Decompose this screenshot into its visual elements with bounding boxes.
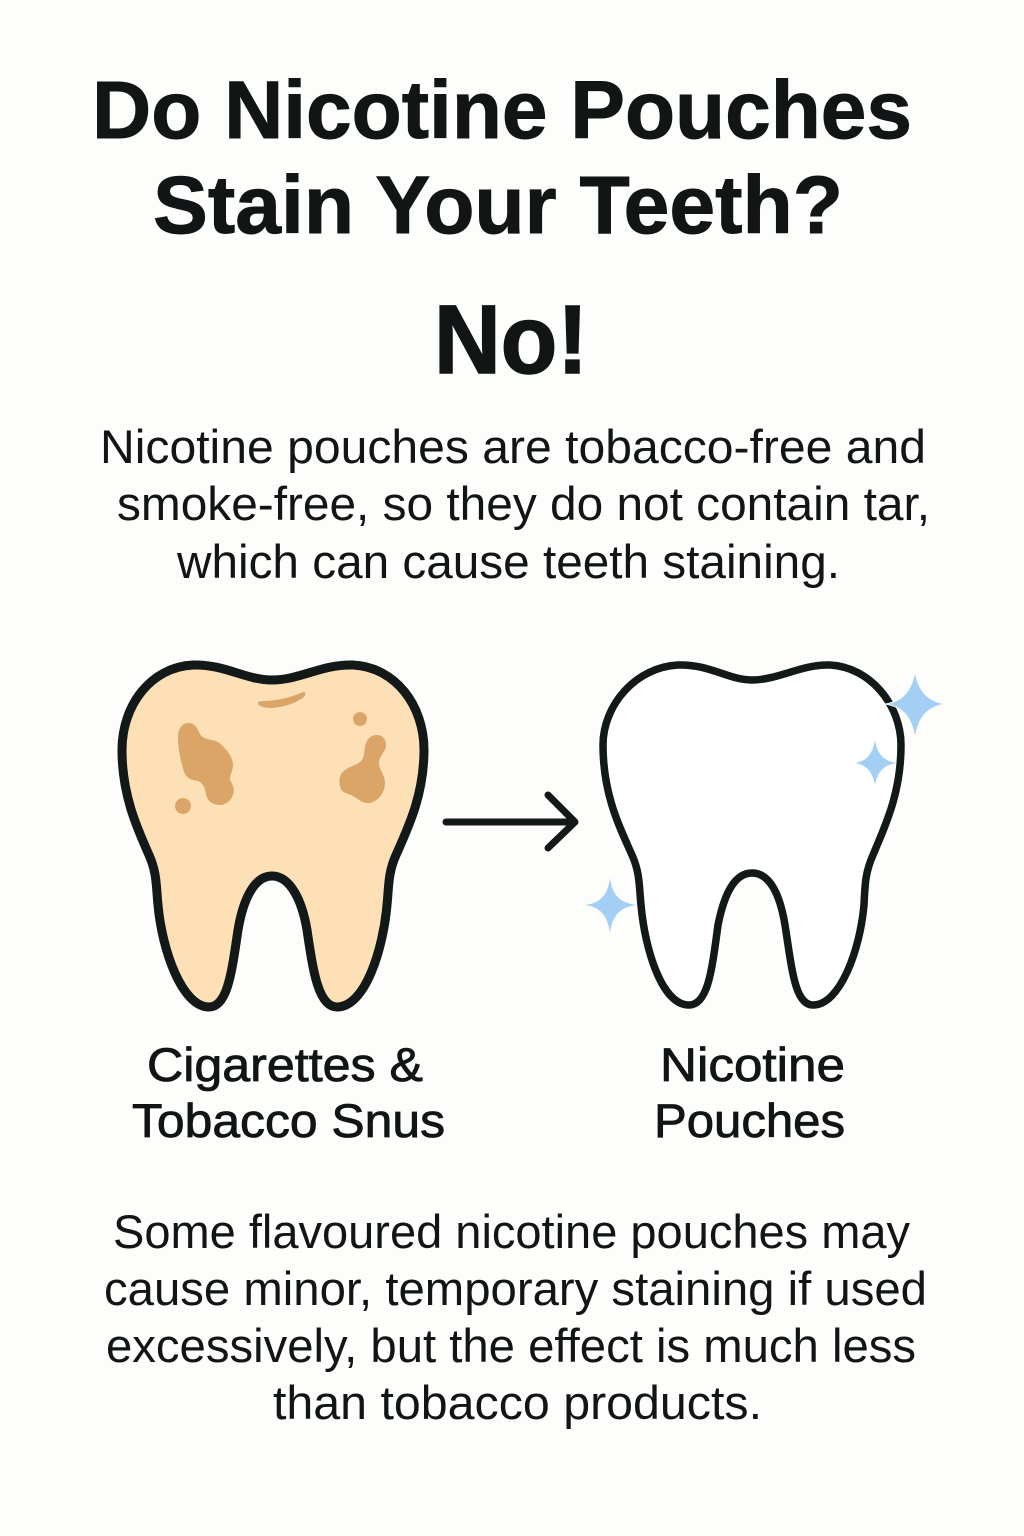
text block: intro: which can cause teeth staining. [176,535,840,588]
stain: right blob [339,735,386,803]
arrow [446,795,575,848]
icon: stained tooth [122,665,424,1007]
stain: left blob [178,723,234,805]
title [92,65,912,251]
heading: answer: No! [434,285,588,394]
label: cigarettes and tobacco snus [132,1038,445,1147]
title: Do Nicotine Pouches [92,65,912,156]
stain: top streak [258,692,305,708]
sparkle: middle right [855,740,897,785]
label: nicotine pouches: Nicotine [660,1038,845,1091]
title: Stain Your Teeth? [153,160,843,251]
label: cigarettes and tobacco snus: Tobacco Snus [132,1094,445,1147]
text block: footnote: than tobacco products. [273,1376,762,1429]
text block: footnote: cause minor, temporary staining if used [104,1262,927,1315]
label: nicotine pouches: Pouches [654,1094,845,1147]
stain: right dot [353,712,367,726]
text block: intro: Nicotine pouches are tobacco-free and [100,420,926,473]
text block: footnote [104,1205,927,1429]
label: cigarettes and tobacco snus: Cigarettes & [147,1038,423,1091]
text block: intro [100,420,930,588]
text block: footnote: Some flavoured nicotine pouches may [113,1205,910,1258]
text block: intro: smoke-free, so they do not contain tar, [117,477,930,530]
label: nicotine pouches [654,1038,845,1147]
sparkle: bottom left [585,878,637,933]
stain: left dot [175,798,191,814]
icon: clean tooth [585,665,946,1005]
text block: footnote: excessively, but the effect is much less [106,1319,916,1372]
sparkle: top right [885,671,946,738]
